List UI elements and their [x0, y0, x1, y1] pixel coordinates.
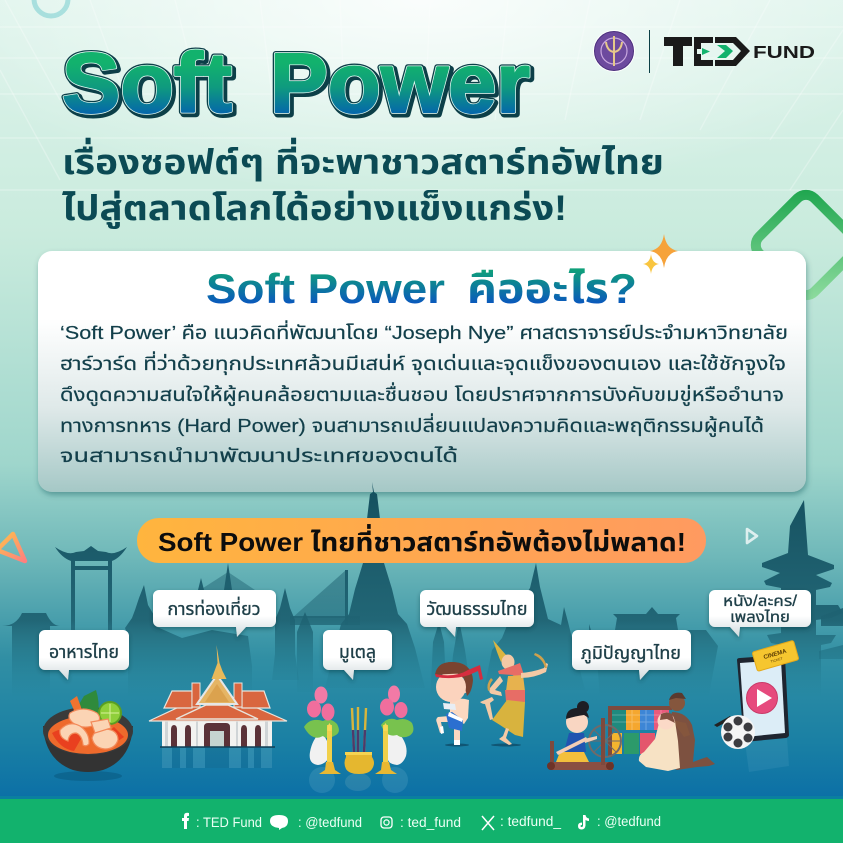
decoration: teal ring top left	[34, 0, 68, 16]
icon: thai dancer	[480, 640, 548, 746]
footer: instagram: : ted_fund	[400, 815, 461, 830]
massage figures	[639, 693, 715, 771]
label: film drama music: เพลงไทย	[730, 609, 790, 626]
footer: facebook	[182, 813, 262, 830]
footer: line: : @tedfund	[298, 815, 362, 830]
label: mutelu: มูเตลู	[339, 642, 376, 664]
textile rack	[608, 706, 672, 757]
title: Soft Power: Soft	[62, 36, 232, 130]
panel body text: ‘Soft Power’ คือ แนวคิดที่พัฒนาโดย “Joseph Nye” ศาสตราจารย์ประจำมหาวิทยาลัย	[60, 320, 788, 343]
panel body text: จนสามารถนำมาพัฒนาประเทศของตนได้	[60, 445, 458, 466]
footer: line	[270, 815, 362, 830]
cinema ticket: TICKET	[770, 656, 784, 664]
label: Thai wisdom	[572, 630, 691, 680]
label: Thai culture: วัฒนธรรมไทย	[426, 599, 528, 619]
footer: tiktok: : @tedfund	[597, 814, 661, 829]
panel body text: ฮาร์วาร์ด ที่ว่าด้วยทุกประเทศล้วนมีเสน่ห์ จุดเด่นและจุดแข็งของตนเอง และใช้ชักจูงใจ	[60, 351, 786, 376]
label: Thai culture	[420, 590, 534, 637]
title: Soft Power: Soft	[62, 36, 232, 130]
title: Soft Power	[62, 36, 532, 132]
panel: what is soft power	[38, 251, 806, 492]
panel heading	[206, 265, 637, 312]
logo: ministry seal	[593, 30, 635, 72]
footer: facebook: : TED Fund	[196, 815, 262, 830]
icon: sparkles	[643, 234, 678, 274]
icon: thai temple	[149, 645, 287, 768]
label: Thai food: อาหารไทย	[49, 642, 119, 662]
panel heading: Soft Power	[206, 265, 445, 312]
title: Soft Power: Soft	[64, 38, 234, 132]
prang 2	[484, 563, 585, 690]
cinema ticket	[752, 640, 799, 671]
label: mutelu	[323, 630, 392, 680]
title: Soft Power: Power	[270, 36, 530, 130]
icon: white play triangle decoration	[747, 529, 757, 543]
panel body text: ทางการทหาร (Hard Power) จนสามารถเปลี่ยนแปลงความคิดและพฤติกรรมผู้คนได้	[60, 413, 764, 438]
label: Thai wisdom: ภูมิปัญญาไทย	[581, 643, 681, 665]
heading pill: Soft Power ไทยที่ชาวสตาร์ทอัพต้องไม่พลาด!	[158, 524, 686, 557]
prang wat arun	[325, 482, 425, 688]
icon: tom yum bowl	[43, 690, 133, 781]
skyline silhouette	[2, 482, 843, 705]
title: Soft Power: Power	[270, 36, 530, 130]
small towers	[272, 588, 299, 680]
panel heading: คืออะไร?	[467, 265, 637, 312]
logo: TED Fund: FUND	[753, 42, 815, 62]
spinning wheel and girl	[547, 701, 621, 770]
title: Soft Power: Soft	[62, 36, 232, 130]
thai pavilion	[589, 607, 718, 700]
subtitle: ไปสู่ตลาดโลกได้อย่างแข็งแกร่ง!	[62, 189, 567, 229]
icon: phone with cinema ticket and film reel	[714, 640, 799, 772]
icon: orange triangle decoration	[0, 534, 25, 561]
panel body text: ดึงดูดความสนใจให้ผู้คนคล้อยตามและชื่นชอบ โดยปราศจากการบังคับขมขู่หรืออำนาจ	[60, 382, 784, 407]
subtitle	[62, 137, 664, 229]
subtitle: เรื่องซอฟต์ๆ ที่จะพาชาวสตาร์ทอัพไทย	[62, 137, 664, 182]
footer: x: : tedfund_	[500, 814, 561, 829]
logo: TED Fund	[649, 30, 815, 73]
bridge	[292, 570, 346, 618]
middle towers	[430, 620, 473, 705]
label: Thai food	[39, 630, 129, 680]
heading pill	[137, 518, 706, 563]
left pagoda	[2, 613, 60, 696]
cinema ticket: CINEMA	[763, 649, 788, 661]
label: film drama music: หนัง/ละคร/	[723, 593, 798, 610]
icon: muay thai boxer	[435, 662, 483, 746]
icon: mutelu offerings	[304, 686, 413, 793]
incense pot	[344, 707, 374, 774]
title: Soft Power: Power	[270, 36, 530, 130]
film reel	[714, 715, 755, 749]
icon: weaving and massage	[547, 693, 715, 771]
label: tourism: การท่องเที่ยว	[168, 596, 260, 619]
panel body text	[60, 320, 788, 466]
footer bar	[0, 796, 843, 843]
label: tourism	[153, 590, 276, 637]
left flower vase	[304, 686, 341, 774]
decoration: green rounded diamond	[751, 190, 843, 300]
giant swing	[55, 546, 127, 632]
right flower vase	[375, 686, 413, 774]
label: film drama music	[709, 590, 811, 637]
title: Soft Power: Power	[272, 38, 532, 132]
right pagoda	[755, 500, 843, 705]
temple left	[125, 585, 252, 696]
